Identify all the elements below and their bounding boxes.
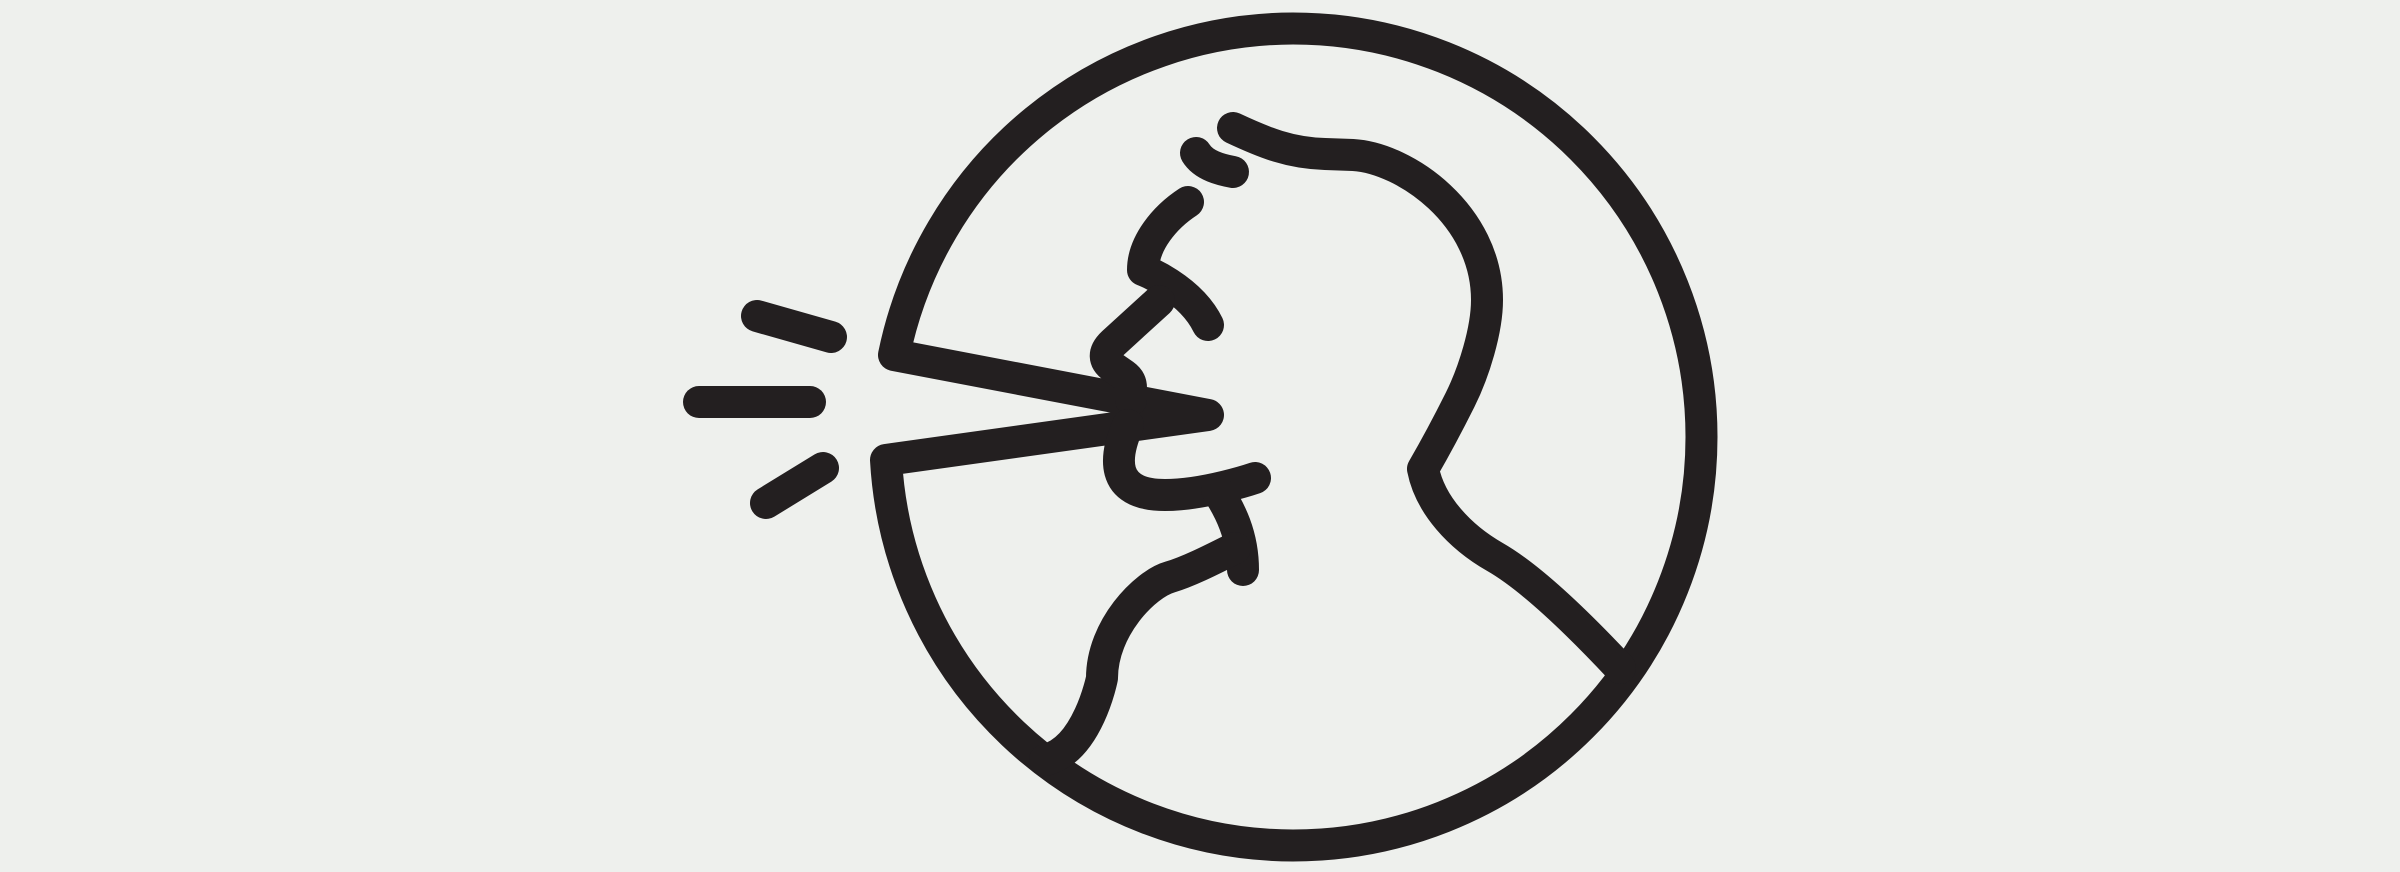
upper lip [1106, 301, 1159, 400]
jaw and throat [1045, 548, 1235, 760]
circle outline with open mouth wedge [886, 28, 1702, 846]
lower sound tick [766, 468, 823, 503]
chin [1217, 490, 1243, 570]
nose [1143, 202, 1208, 325]
lower lip [1119, 425, 1255, 495]
sound lines [699, 316, 831, 503]
middle sound tick [699, 386, 810, 418]
head and neck back contour [1233, 128, 1620, 668]
eye mark [1196, 153, 1233, 172]
upper sound tick [757, 316, 831, 337]
icon group [699, 28, 1702, 846]
